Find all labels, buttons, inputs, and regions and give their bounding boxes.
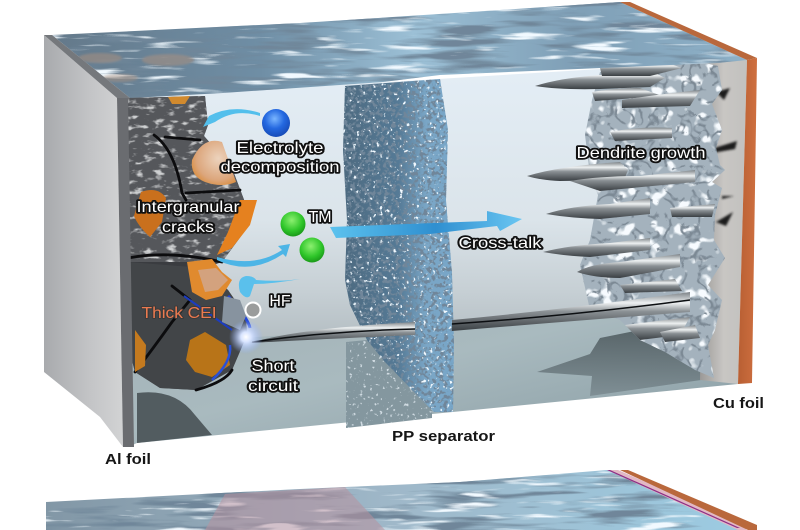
label: PP separator: PP separator (392, 429, 495, 445)
orange CEI patch, upper left (134, 190, 166, 237)
pink surface patch (205, 487, 385, 530)
top electrolyte surface (52, 2, 747, 98)
copper foil top edge (620, 2, 757, 60)
aluminium foil front edge (117, 98, 134, 447)
back wall (128, 60, 747, 350)
separator (343, 79, 454, 412)
lower electrolyte surface (46, 470, 744, 530)
label: Cu foil: Cu foil (713, 396, 764, 412)
label: thick CEI: Thick CEI (142, 305, 216, 322)
grey textured particle (222, 296, 246, 330)
icon: transition metal ion 1 (280, 212, 306, 236)
arrow: electrolyte decomposition (203, 109, 260, 127)
label: intergranular: Intergranular (136, 199, 240, 216)
orange CEI patch, peach (192, 141, 236, 185)
label: Al foil: Al foil (105, 452, 151, 468)
arrow: cross-talk (330, 211, 522, 238)
orange CEI patch, left (135, 330, 146, 372)
floor (128, 300, 738, 447)
panel: lower battery cell top (46, 470, 757, 530)
arrow: HF attack (239, 276, 300, 297)
label: TM: TM (308, 209, 332, 226)
blue CEI glow (228, 296, 250, 328)
lower interphase layer (607, 470, 750, 530)
metal dendrite mass (580, 62, 725, 378)
long dendrite causing short circuit (250, 292, 690, 343)
purple interphase line (607, 470, 740, 528)
label: HF: HF (269, 293, 291, 310)
aluminium foil edge (44, 35, 130, 98)
panel: upper battery cell (44, 2, 757, 447)
icon: electrolyte molecule (262, 109, 290, 137)
aluminium foil side face (44, 35, 123, 447)
orange CEI patch, middle (187, 259, 232, 300)
floor shadow of particle (137, 392, 212, 443)
arrow: transition metal dissolution (217, 244, 290, 267)
label: short: Short (252, 358, 295, 375)
label: cracks: cracks (162, 219, 214, 236)
orange CEI patch, right rim (217, 200, 257, 255)
orange CEI patch, lower (186, 332, 230, 377)
icon: transition metal ion 2 (300, 238, 324, 262)
icon: HF molecule (246, 302, 260, 318)
intergranular crack lines (128, 135, 240, 390)
separator reflection on floor (346, 340, 432, 428)
dendrite shadow on floor (537, 330, 715, 396)
current collector back plate (700, 60, 747, 384)
cathode particles (128, 96, 257, 390)
label: cross-talk: Cross-talk (458, 235, 543, 252)
label: dendrite growth: Dendrite growth (576, 145, 706, 162)
dendrite needles (527, 62, 715, 342)
label: electrolyte decomposition: Electrolyte (236, 140, 324, 157)
label: circuit: circuit (248, 378, 299, 395)
copper foil side (738, 58, 757, 384)
label: decomposition: decomposition (220, 159, 340, 176)
rock body (128, 96, 247, 390)
lower copper foil (620, 470, 757, 530)
dendrite ridges on plate (708, 88, 737, 226)
short circuit spark (229, 320, 263, 354)
top orange patch (168, 96, 190, 104)
